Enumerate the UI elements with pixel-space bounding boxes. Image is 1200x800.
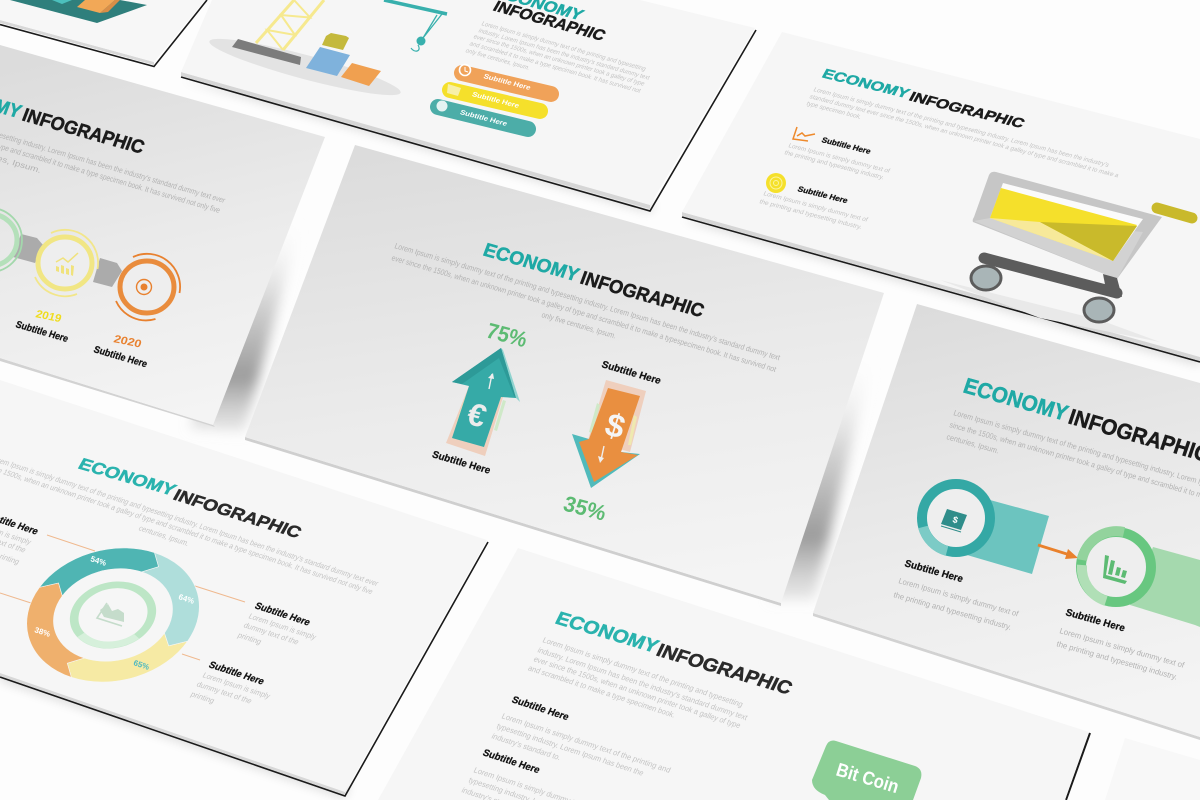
item: subtitle right: [236, 601, 318, 647]
item: subtitle right: Subtitle Here: [1064, 607, 1127, 634]
item: subtitle one: typesetting industry. Lorem Ipsum has been the: [495, 722, 646, 778]
body text: only five centuries, Ipsum.: [540, 310, 617, 340]
donut chart: 38%: [33, 625, 51, 639]
body text: [0, 84, 227, 215]
panel: bottom-right partial slide: [1105, 738, 1200, 800]
crane illustration: [206, 0, 447, 104]
item: subtitle right: Lorem Ipsum is simply: [247, 612, 318, 641]
item: subtitle one: industry's standard to.: [490, 732, 562, 762]
body text: Lorem Ipsum is simply dummy text of the printing and typesetting: [541, 636, 745, 709]
node: green chart: [1081, 531, 1200, 627]
node: teal money: [922, 484, 1049, 574]
item: subtitle one: Lorem Ipsum is simply dummy text of: [787, 142, 891, 175]
title: INFOGRAPHIC: [490, 0, 609, 44]
icon: target: [766, 173, 786, 193]
item: subtitle right: the printing and typesetting industry.: [1055, 639, 1179, 682]
label: 2020: 2020: [112, 333, 143, 350]
item: subtitle left: the printing and typesetting industry.: [892, 590, 1013, 632]
body text: ever since the 1500s, when an unknown printer took a galley of type: [532, 655, 743, 730]
item: subtitle right: [1055, 607, 1186, 682]
timeline node: green: [0, 208, 22, 272]
donut chart: 64%: [177, 592, 195, 606]
label: up arrow subtitle: Subtitle Here: [430, 450, 492, 477]
body text: centuries, Ipsum.: [945, 432, 1000, 455]
item: subtitle lower: printing: [189, 690, 216, 705]
body text: and scrambled it to make a type specimen book.: [527, 664, 677, 720]
title: INFOGRAPHIC: [907, 89, 1028, 131]
panel: right circles slide: [813, 304, 1200, 740]
title: [0, 78, 147, 158]
body text: Lorem Ipsum is simply dummy text of the printing and typesetting: [480, 21, 648, 73]
arrow: up with euro: €: [463, 395, 491, 435]
label: 2019: [14, 308, 70, 345]
item: subtitle lower: Subtitle Here: [207, 660, 266, 687]
panel: bottom bitcoin slide: [378, 548, 1090, 800]
label: 2019: Subtitle Here: [14, 320, 70, 345]
panel: left timeline slide: [0, 45, 325, 427]
title: INFOGRAPHIC: [577, 268, 707, 322]
item: subtitle upper left: [0, 510, 40, 566]
pill: orange: Subtitle Here: [482, 73, 532, 92]
cast shadow: between left slide and center slide: [190, 215, 300, 432]
shopping cart: [940, 172, 1192, 342]
pill: yellow: Subtitle Here: [471, 91, 520, 110]
item: subtitle lower: [189, 660, 272, 706]
body text: type specimen book.: [805, 101, 863, 121]
title: INFOGRAPHIC: [170, 486, 305, 542]
title: [480, 240, 707, 322]
label: 2019: 2019: [34, 308, 63, 325]
donut chart: [20, 545, 206, 685]
title: [75, 455, 305, 542]
body text: centuries, Ipsum.: [137, 524, 191, 548]
body text: Lorem Ipsum is simply dummy text of the printing and typesetting industry. Lorem Ipsum has been the industry's: [812, 87, 1111, 169]
timeline node: yellow: [35, 230, 98, 296]
body text: and scrambled it to make a type specimen book. It has survived not: [468, 41, 642, 95]
title: ECONOMY: [75, 455, 180, 499]
label: 2020: Subtitle Here: [92, 345, 149, 370]
icon: bar chart: [1103, 555, 1127, 584]
item: subtitle left: Lorem Ipsum is simply dummy text of: [897, 576, 1020, 619]
title: [552, 609, 796, 699]
donut chart: 54%: [89, 554, 107, 568]
icon: rising bars: [56, 253, 78, 276]
title: ECONOMY: [820, 66, 913, 101]
title: ECONOMY: [552, 609, 662, 658]
title: INFOGRAPHIC: [19, 105, 147, 158]
item: subtitle two: the printing and typesetting industry.: [758, 198, 863, 231]
label: 2020: [92, 333, 149, 370]
item: subtitle lower: Lorem Ipsum is simply: [201, 671, 272, 700]
item: subtitle two: Lorem Ipsum is simply dummy text of: [762, 190, 869, 224]
panel: top-left partial slide: [0, 0, 207, 66]
stat: 75%: 75%: [483, 318, 531, 352]
item: subtitle two: [758, 185, 869, 231]
body text: ever since the 1500s, when an unknown printer took a galley of type and scrambled it to make a typespecimen book. It has survived not: [390, 253, 778, 374]
body text: industry. Lorem Ipsum has been the industry's standard dummy text: [536, 646, 750, 722]
item: subtitle lower: dummy text of the: [195, 680, 254, 706]
body text: only five centuries, Ipsum.: [464, 48, 531, 72]
item: subtitle right: Lorem Ipsum is simply dummy text of: [1058, 626, 1186, 670]
pill: teal: [436, 100, 528, 129]
timeline node: orange: [116, 254, 180, 320]
item: subtitle two: [460, 748, 644, 800]
body text: Lorem Ipsum is simply dummy text of the printing and typesetting industry. Lorem Ipsum has been the industry's standard dummy text: [393, 241, 782, 362]
title: INFOGRAPHIC: [653, 641, 796, 699]
item: subtitle one: Subtitle Here: [820, 136, 873, 156]
body text: Lorem Ipsum is simply dummy text of the printing and typesetting industry. Lorem Ipsum has been the industry's standard dummy text ever: [0, 454, 380, 588]
title: [960, 373, 1200, 467]
icon: target coin: [136, 280, 152, 294]
item: subtitle right: dummy text of the: [242, 621, 301, 647]
leader lines: [0, 535, 245, 660]
pill: yellow: [447, 84, 540, 111]
icon: growth chart: [793, 127, 815, 141]
pill: orange: [460, 64, 551, 94]
donut chart: 65%: [132, 658, 150, 672]
arrow: down with dollar: [572, 380, 646, 488]
pill: teal: Subtitle Here: [459, 109, 508, 128]
body text: ever since the 1500s, when an unknown printer took a galley of type: [472, 34, 646, 88]
label: down arrow subtitle: Subtitle Here: [600, 360, 663, 387]
title: [820, 66, 1028, 131]
item: subtitle left: Subtitle Here: [903, 558, 965, 585]
panel: center arrows slide: [245, 145, 884, 606]
title: ECONOMY: [960, 373, 1072, 426]
item: subtitle one: Lorem Ipsum is simply dummy text of the printing and: [500, 712, 672, 775]
item: subtitle one: the printing and typesetting industry.: [783, 149, 885, 181]
arrow: up with euro: [446, 348, 520, 456]
panel: top crane slide: [181, 0, 756, 211]
item: subtitle left: [892, 558, 1020, 632]
body text: standard dummy text ever since the 1500s, when an unknown printer took a galley of type and scrambled it to make a: [808, 94, 1120, 179]
title: ECONOMY: [480, 240, 582, 286]
arrow: down with dollar: $: [601, 405, 630, 446]
item: subtitle right: printing: [236, 631, 263, 646]
item: subtitle one: [783, 136, 891, 181]
connectors: [13, 234, 122, 287]
icon: banknote: $: [951, 514, 959, 525]
teal platform with blocks: [10, 0, 147, 23]
body text: industry. Lorem Ipsum has been the industry's standard dummy text: [477, 28, 651, 82]
arrow: teal to green: [1038, 545, 1078, 559]
item: subtitle one: Subtitle Here: [510, 695, 571, 723]
cast shadow: between center slide and right slide: [770, 350, 872, 600]
item: subtitle two: Subtitle Here: [796, 185, 850, 205]
stat: 35%: 35%: [560, 491, 609, 526]
icon: area chart: [97, 603, 124, 626]
item: subtitle two: Subtitle Here: [481, 748, 542, 776]
callout: Bit Coin bubble: Bit Coin: [833, 760, 901, 798]
callout: Bit Coin bubble: [812, 741, 921, 800]
panel: top-right shopping cart slide: [682, 32, 1200, 362]
item: subtitle right: Subtitle Here: [253, 601, 312, 628]
panel: bottom-left donut slide: [0, 380, 488, 796]
